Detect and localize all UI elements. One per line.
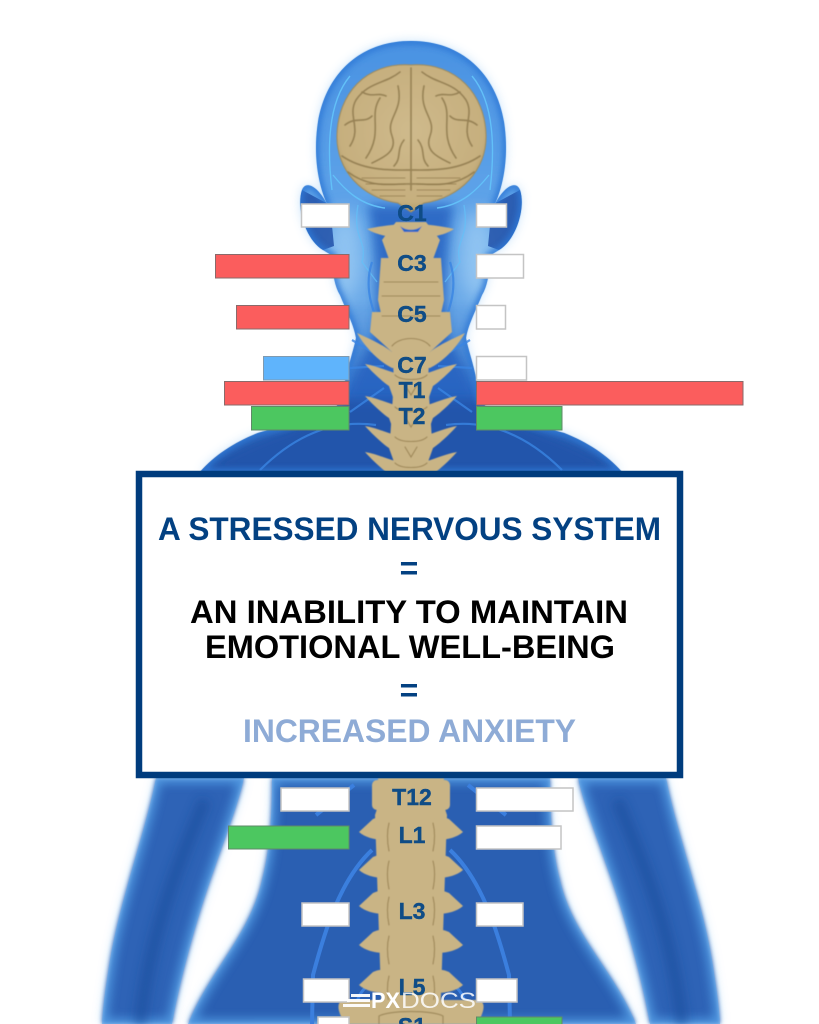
brain bbox=[337, 65, 486, 212]
vertebra labels: C7 bbox=[397, 352, 427, 378]
text: inability line 1: AN INABILITY TO MAINTAIN bbox=[190, 594, 628, 630]
vertebra labels bbox=[392, 200, 432, 1024]
vertebra labels: L5 bbox=[399, 974, 426, 1000]
text: increased anxiety: INCREASED ANXIETY bbox=[243, 713, 576, 749]
human figure: arms and torso below the text box bbox=[102, 778, 720, 1024]
vertebra labels: T12 bbox=[392, 784, 432, 810]
heading: stressed nervous system: A STRESSED NERVOUS SYSTEM bbox=[158, 511, 661, 547]
PX DOCS watermark logo: PX bbox=[371, 988, 400, 1013]
infographic canvas bbox=[97, 36, 744, 1024]
PX DOCS watermark logo: DOCS bbox=[401, 988, 476, 1013]
vertebra labels: L1 bbox=[399, 822, 426, 848]
bars: right side bbox=[476, 204, 743, 1024]
human figure: head, neck and shoulders bbox=[200, 41, 622, 472]
spine: lower thoracic, lumbar and sacrum bbox=[338, 778, 484, 1024]
equals sign 1: = bbox=[400, 550, 418, 586]
vertebra labels: T2 bbox=[399, 403, 425, 429]
vertebra labels: C5 bbox=[397, 301, 427, 327]
PX DOCS watermark logo bbox=[343, 988, 476, 1013]
spine: cervical and thoracic vertebrae bbox=[357, 222, 465, 488]
vertebra labels: C1 bbox=[397, 200, 427, 226]
equals sign 2: = bbox=[400, 672, 418, 708]
bars: left side bbox=[216, 204, 349, 1024]
vertebra labels: C3 bbox=[397, 250, 427, 276]
vertebra labels: L3 bbox=[399, 898, 425, 924]
callout box bbox=[139, 474, 680, 775]
text: inability line 2: EMOTIONAL WELL-BEING bbox=[205, 629, 615, 665]
vertebra labels: T1 bbox=[399, 377, 426, 403]
